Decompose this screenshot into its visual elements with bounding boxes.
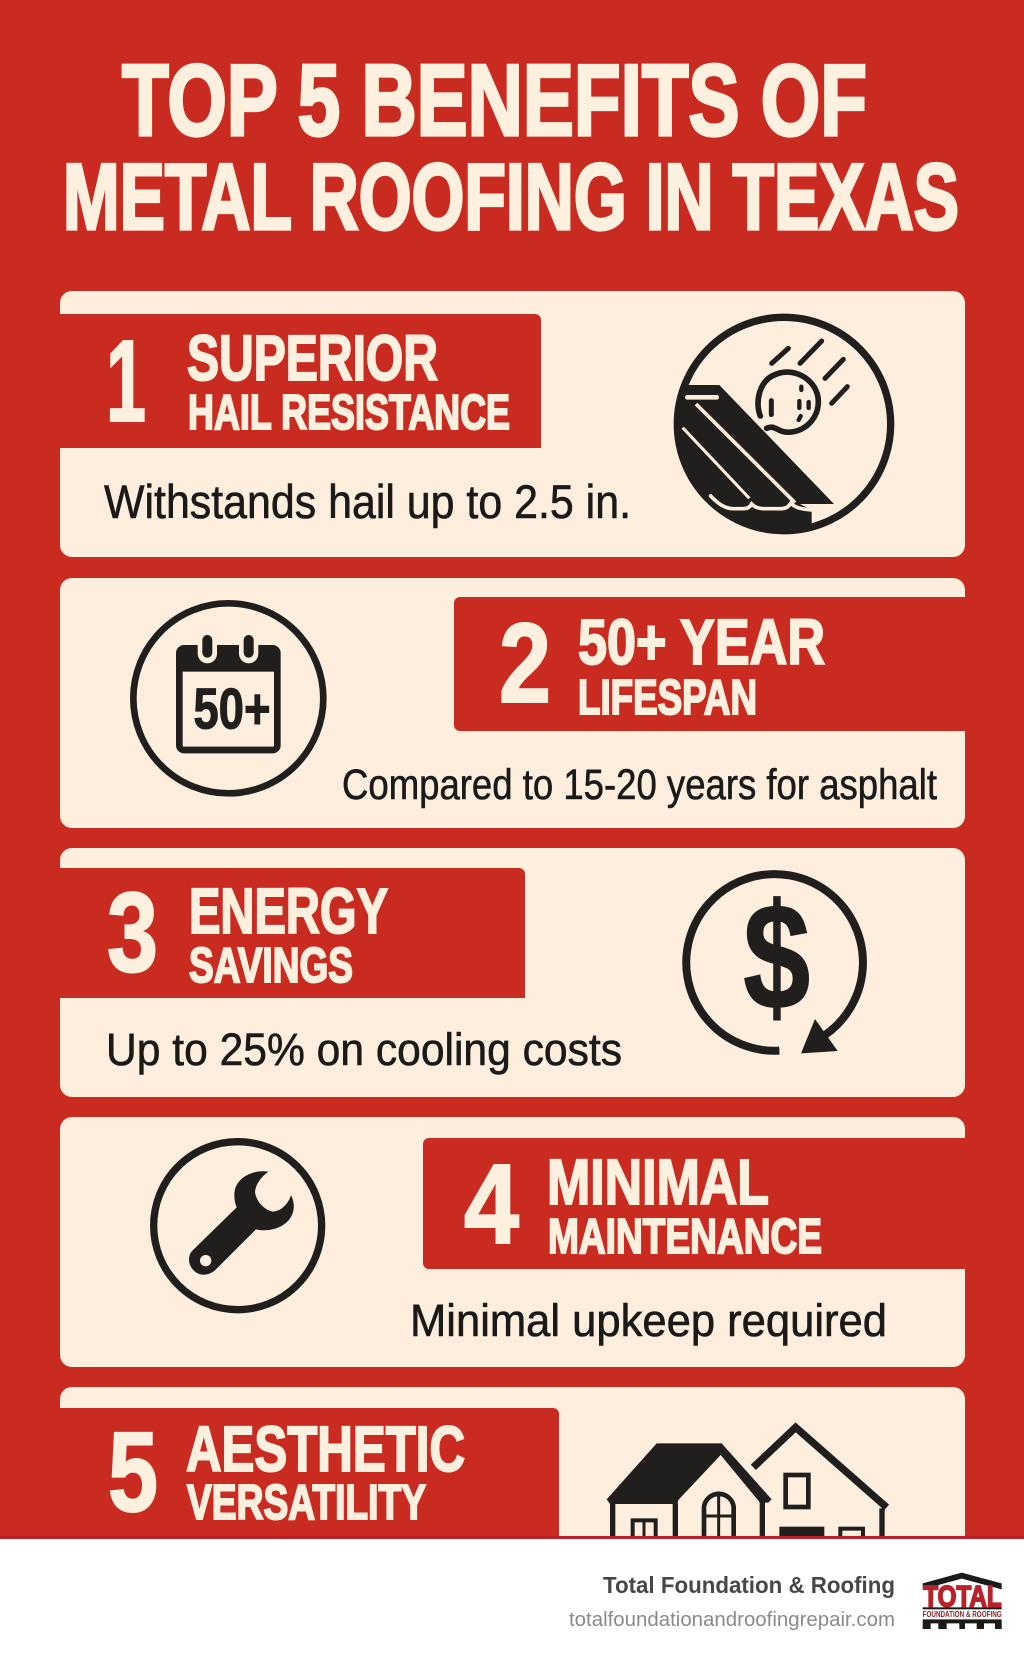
- label banner 4: MAINTENANCE: [548, 1210, 822, 1264]
- label banner 2: LIFESPAN: [578, 671, 757, 725]
- label banner 3: 3: [107, 869, 158, 995]
- label banner 5: VERSATILITY: [187, 1476, 426, 1530]
- footer background: [0, 1539, 1024, 1666]
- label banner 4: 4: [464, 1141, 519, 1267]
- panel: superior hail resistance: [60, 291, 965, 557]
- icon: dollar savings cycle: $: [743, 872, 810, 1041]
- label banner 5: [60, 1408, 559, 1536]
- title: [63, 45, 959, 249]
- panel: aesthetic versatility: [60, 1387, 965, 1549]
- label banner 5: AESTHETIC: [186, 1413, 465, 1485]
- footer company name: Total Foundation & Roofing: [603, 1572, 895, 1598]
- label banner 4: [423, 1138, 965, 1269]
- icon: calendar 50+: [133, 603, 323, 793]
- icon: wrench: [154, 1142, 322, 1310]
- label banner 3: ENERGY: [189, 875, 388, 947]
- logo: TOTAL: [923, 1580, 1002, 1613]
- description 1: Withstands hail up to 2.5 in.: [104, 475, 631, 528]
- panel: minimal maintenance: [60, 1117, 965, 1367]
- panel: energy savings: [60, 848, 965, 1097]
- label banner 1: 1: [106, 316, 146, 446]
- label banner 2: 50+ YEAR: [578, 606, 825, 678]
- label banner 1: SUPERIOR: [187, 322, 438, 394]
- label banner 5: 5: [108, 1409, 158, 1535]
- label banner 1: HAIL RESISTANCE: [188, 386, 510, 440]
- description 2: Compared to 15-20 years for asphalt: [342, 761, 937, 809]
- icon: calendar 50+: 50+: [193, 677, 271, 741]
- footer website: totalfoundationandroofingrepair.com: [569, 1609, 895, 1631]
- label banner 3: SAVINGS: [189, 939, 353, 993]
- label banner 4: MINIMAL: [547, 1146, 769, 1218]
- panel: 50+ year lifespan: [60, 578, 965, 828]
- logo: [923, 1573, 1002, 1629]
- icon: dollar savings cycle: [686, 872, 863, 1053]
- label banner 3: [60, 868, 525, 998]
- label banner 1: [60, 314, 541, 448]
- logo: FOUNDATION & ROOFING: [923, 1610, 1002, 1619]
- label banner 2: 2: [499, 600, 551, 726]
- label banner 2: [454, 597, 965, 731]
- description 3: Up to 25% on cooling costs: [106, 1024, 622, 1075]
- icon: hail on metal roof: [667, 317, 891, 547]
- icon: houses: [607, 1427, 887, 1549]
- description 4: Minimal upkeep required: [410, 1295, 887, 1346]
